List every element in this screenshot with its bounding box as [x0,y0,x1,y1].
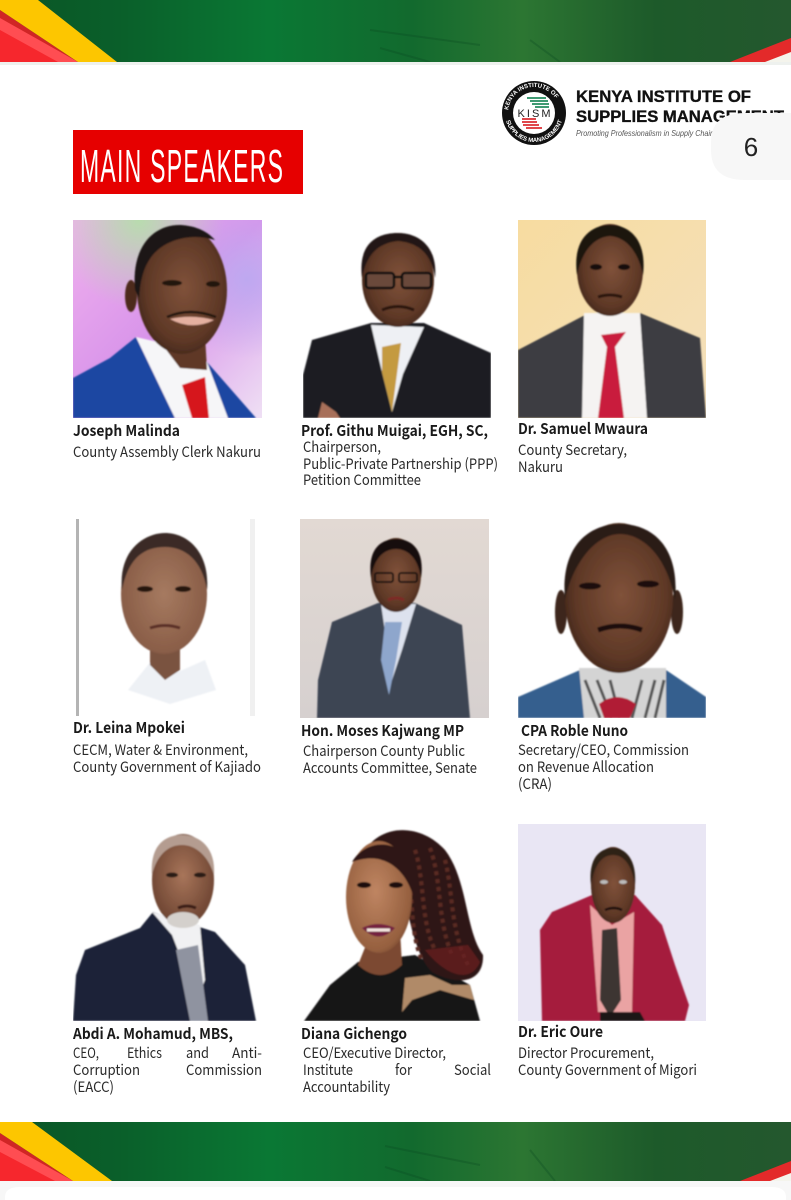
role: CEO/Executive Director, [303,1042,446,1063]
panel: Prof. Githu Muigai [301,233,498,490]
role [73,1042,262,1097]
role: Chairperson County Public [303,740,465,761]
role: County Government of Migori [518,1059,697,1080]
role: Social [454,1059,491,1080]
role: Ethics [127,1042,162,1063]
name: Dr. Leina Mpokei [73,717,185,738]
panel: Diana Gichengo [301,830,491,1097]
portrait: Leina Mpokei [76,519,255,716]
panel: Abdi A. Mohamud [72,834,262,1097]
panel: CPA Roble Nuno [518,523,706,794]
bottom banner [0,1122,791,1181]
name: Abdi A. Mohamud, MBS, [72,1023,233,1044]
panel: Dr. Eric Oure [518,824,706,1080]
role: and [186,1042,209,1063]
role: Petition Committee [303,469,421,490]
role: County Government of Kajiado [73,756,261,777]
top banner [0,0,791,62]
banner edge [0,62,791,65]
organisation name: KENYA INSTITUTE OF [576,87,751,106]
role [303,436,498,490]
name: Prof. Githu Muigai, EGH, SC, [301,420,488,441]
portrait: Roble Nuno [518,523,706,718]
portrait: Moses Kajwang [300,519,489,718]
page number tab: 6 [744,132,758,162]
panel: Dr. Samuel Mwaura [518,220,706,477]
logo: KISM: SUPPLIES MANAGEMENT [506,119,562,142]
role: on Revenue Allocation [518,756,654,777]
name: CPA Roble Nuno [521,720,628,741]
name: Hon. Moses Kajwang MP [301,720,464,741]
role: for [395,1059,412,1080]
role [73,739,261,777]
page number tab [711,113,791,180]
role: Corruption [73,1059,140,1080]
footer strip [0,1181,791,1200]
logo: KISM: KISM [518,108,550,120]
role: CEO, [73,1042,99,1063]
role: Nakuru [518,456,563,477]
portrait: Samuel Mwaura [518,220,706,418]
portrait: Abdi Mohamud [73,834,256,1021]
role [518,739,689,794]
logo: KISM [502,81,566,145]
name: Joseph Malinda [73,420,180,441]
organisation name [576,87,785,126]
panel: Dr. Leina Mpokei [73,519,261,777]
tagline: Promoting Professionalism in Supply Chain [576,128,714,138]
role: CECM, Water & Environment, [73,739,248,760]
role: Public-Private Partnership (PPP) [303,453,498,474]
role: Secretary/CEO, Commission [518,739,689,760]
role: Chairperson, [303,436,381,457]
role: County Secretary, [518,439,627,460]
role: Anti- [232,1042,262,1063]
role: County Assembly Clerk Nakuru [73,441,261,462]
portrait: Diana Gichengo [304,830,483,1021]
role [518,1042,697,1080]
role [303,1042,491,1097]
role: (EACC) [73,1076,114,1097]
panel: Joseph Malinda [73,220,262,462]
role [518,439,627,477]
panel: Hon. Moses Kajwang [300,519,489,778]
heading: main speakers: MAIN SPEAKERS [80,140,283,192]
role: Director Procurement, [518,1042,654,1063]
organisation name: SUPPLIES MANAGEMENT [576,107,785,126]
portrait: Eric Oure [518,824,706,1021]
name: Diana Gichengo [301,1023,407,1044]
role [303,740,477,778]
role: (CRA) [518,773,552,794]
portrait: Joseph Malinda [73,220,262,418]
role: Institute [303,1059,353,1080]
role: Accountability [303,1076,390,1097]
logo: KISM: KENYA INSTITUTE OF [504,82,559,110]
role: Commission [186,1059,262,1080]
role: Accounts Committee, Senate [303,757,477,778]
name: Dr. Eric Oure [518,1021,603,1042]
portrait: Githu Muigai [303,233,491,418]
name: Dr. Samuel Mwaura [518,418,648,439]
